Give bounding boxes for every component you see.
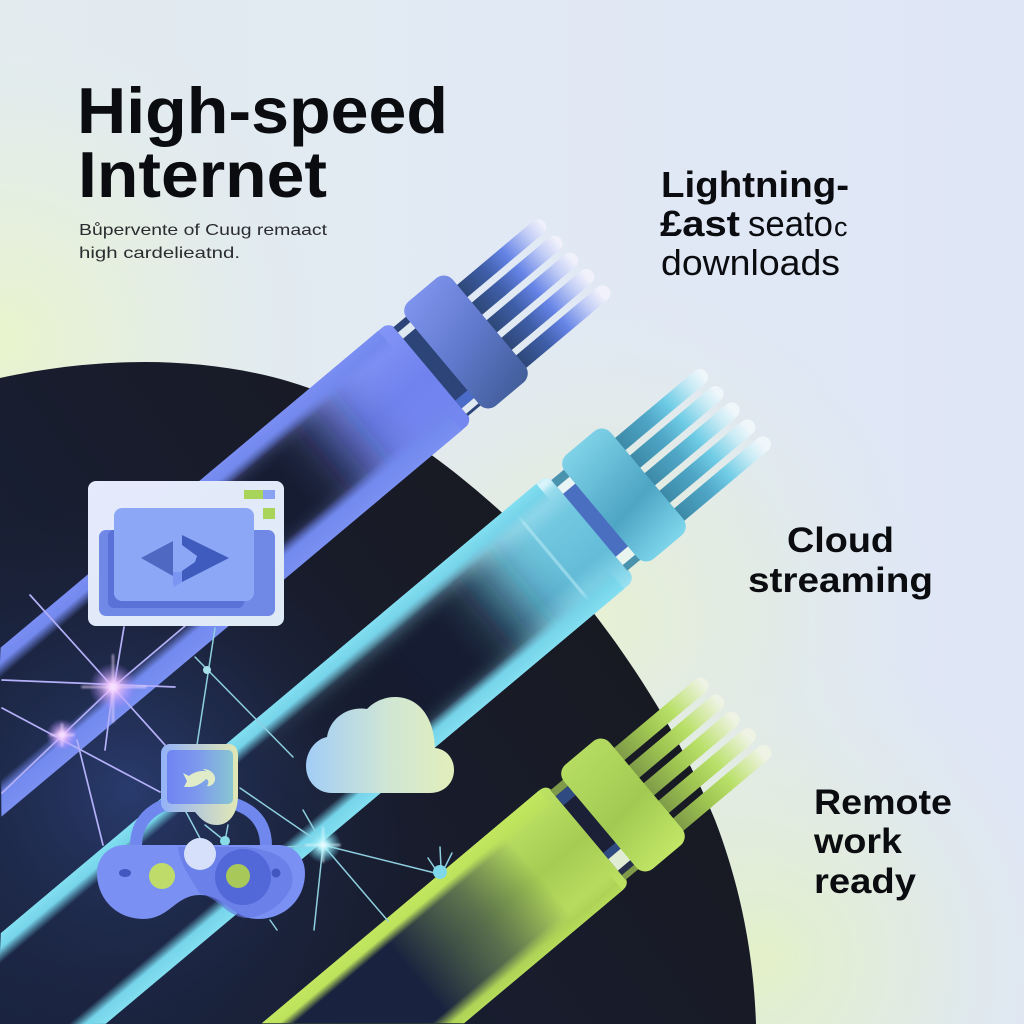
blue collar band: [393, 316, 482, 416]
cyan collar band: [551, 469, 641, 571]
label: lightning-fast downloads: [660, 164, 849, 283]
green connector cap: [556, 734, 690, 876]
green fiber strands: [607, 671, 775, 837]
label: cloud streaming: [748, 521, 933, 600]
label: cloud streaming: Cloud: [787, 521, 894, 560]
subtitle text: [79, 221, 328, 262]
blue connector cap: [399, 271, 533, 413]
title: [77, 74, 448, 211]
icon: cloud: [306, 697, 454, 793]
label: remote work ready: ready: [814, 862, 917, 901]
title: Internet: [78, 138, 327, 211]
label: remote work ready: [813, 783, 952, 901]
blue cable body: [0, 321, 473, 817]
label: lightning-fast downloads: £ast: [660, 203, 740, 244]
label: lightning-fast downloads: Lightning-: [661, 164, 849, 205]
subtitle text: high cardelieatnd.: [79, 245, 240, 262]
green collar band: [550, 779, 639, 880]
icon: VR headset: [97, 744, 305, 919]
cyan cable body: [0, 474, 636, 1024]
icon: browser window: [88, 481, 284, 626]
headset visor: [97, 845, 305, 919]
label: lightning-fast downloads: c: [834, 212, 848, 242]
cable: blue fiber: [0, 197, 620, 819]
blue fiber strands: [450, 212, 614, 374]
cable: green fiber: [260, 657, 781, 1024]
headset sensor: [184, 838, 216, 870]
label: remote work ready: Remote: [814, 783, 952, 822]
green cable body: [262, 784, 630, 1024]
label: cloud streaming: streaming: [748, 561, 933, 600]
purple star burst: [46, 655, 146, 751]
cyan fiber strands: [608, 363, 774, 527]
dark circle backdrop: [0, 362, 756, 1024]
label: lightning-fast downloads: downloads: [661, 242, 840, 283]
subtitle text: Bůpervente of Cuug remaact: [79, 221, 328, 239]
cyan connector cap: [557, 424, 691, 566]
title: High-speed: [77, 74, 448, 147]
label: remote work ready: work: [813, 822, 903, 861]
cable: cyan fiber: [0, 348, 783, 1024]
headset lenses: [119, 863, 280, 889]
cyan star burst: [203, 666, 447, 879]
network constellation: [2, 595, 452, 930]
headset screen card: [161, 744, 238, 825]
label: lightning-fast downloads: seato: [748, 203, 833, 244]
headset strap: [136, 799, 266, 846]
